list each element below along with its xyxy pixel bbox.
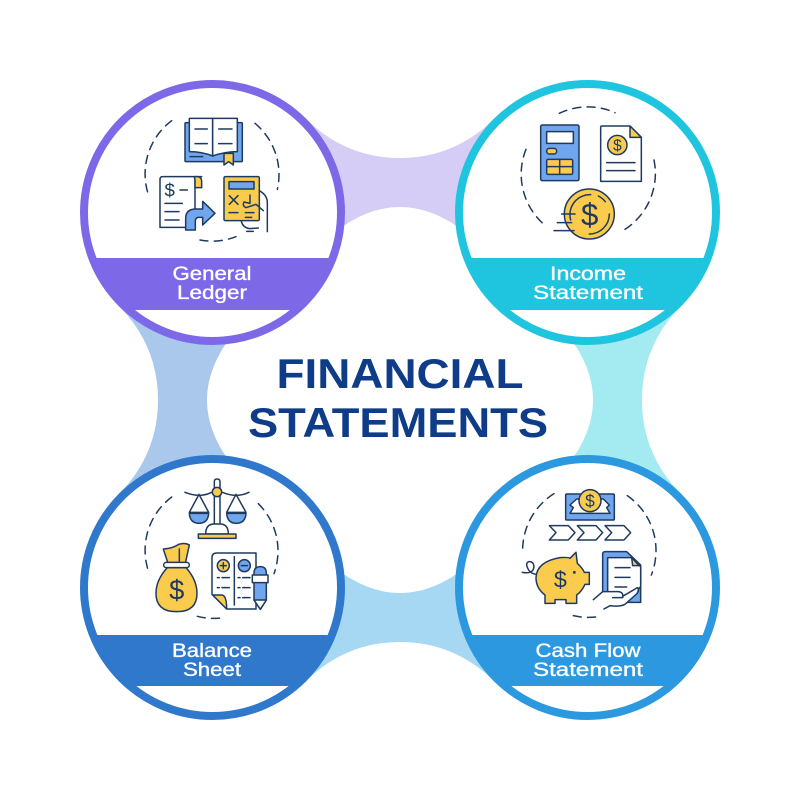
icon: chevrons <box>549 526 631 540</box>
icon: sheet with pencil <box>212 553 268 609</box>
connector: top purple <box>305 118 495 245</box>
banner: Balance Sheet <box>98 635 328 686</box>
icon group: ledger <box>145 118 279 241</box>
icon: scales <box>185 479 249 538</box>
title <box>248 350 548 446</box>
icon: book <box>185 118 242 165</box>
icon group: balance <box>145 479 278 618</box>
label: General Ledger: General <box>172 264 252 285</box>
icon: blue calculator <box>541 125 579 181</box>
icon: calculator in hand <box>224 177 267 232</box>
panel: Balance Sheet <box>80 459 346 716</box>
banner: Cash Flow Statement <box>472 635 702 686</box>
label: Cash Flow Statement: Statement <box>533 660 644 681</box>
label: General Ledger: Ledger <box>177 283 248 304</box>
icon: banknote with coin: $ <box>585 491 595 511</box>
label: Income Statement: Income <box>550 264 626 285</box>
title: STATEMENTS <box>248 399 548 446</box>
icon: receipt with arrow: $ <box>164 179 175 200</box>
icon: moving coin: $ <box>581 197 598 232</box>
connector: left blue <box>118 305 245 495</box>
connector: bottom sky <box>305 555 495 682</box>
icon: document in hand <box>593 552 641 609</box>
banner: General Ledger <box>96 258 328 310</box>
icon: document with coin: $ <box>613 138 622 155</box>
banner: Income Statement <box>472 258 704 310</box>
panel: Income Statement <box>455 84 721 341</box>
title: FINANCIAL <box>276 350 524 397</box>
label: Income Statement: Statement <box>533 283 644 304</box>
panel: General Ledger <box>80 84 346 341</box>
icon: money bag: $ <box>169 574 184 605</box>
label: Balance Sheet: Balance <box>172 641 252 662</box>
panel: Cash Flow Statement <box>455 459 721 716</box>
connector: right aqua <box>555 305 682 495</box>
icon group: income <box>521 107 655 239</box>
label: Cash Flow Statement: Cash Flow <box>536 641 641 662</box>
icon: piggy bank: $ <box>554 567 567 593</box>
icon group: cash flow <box>522 490 656 617</box>
label: Balance Sheet: Sheet <box>183 660 242 681</box>
